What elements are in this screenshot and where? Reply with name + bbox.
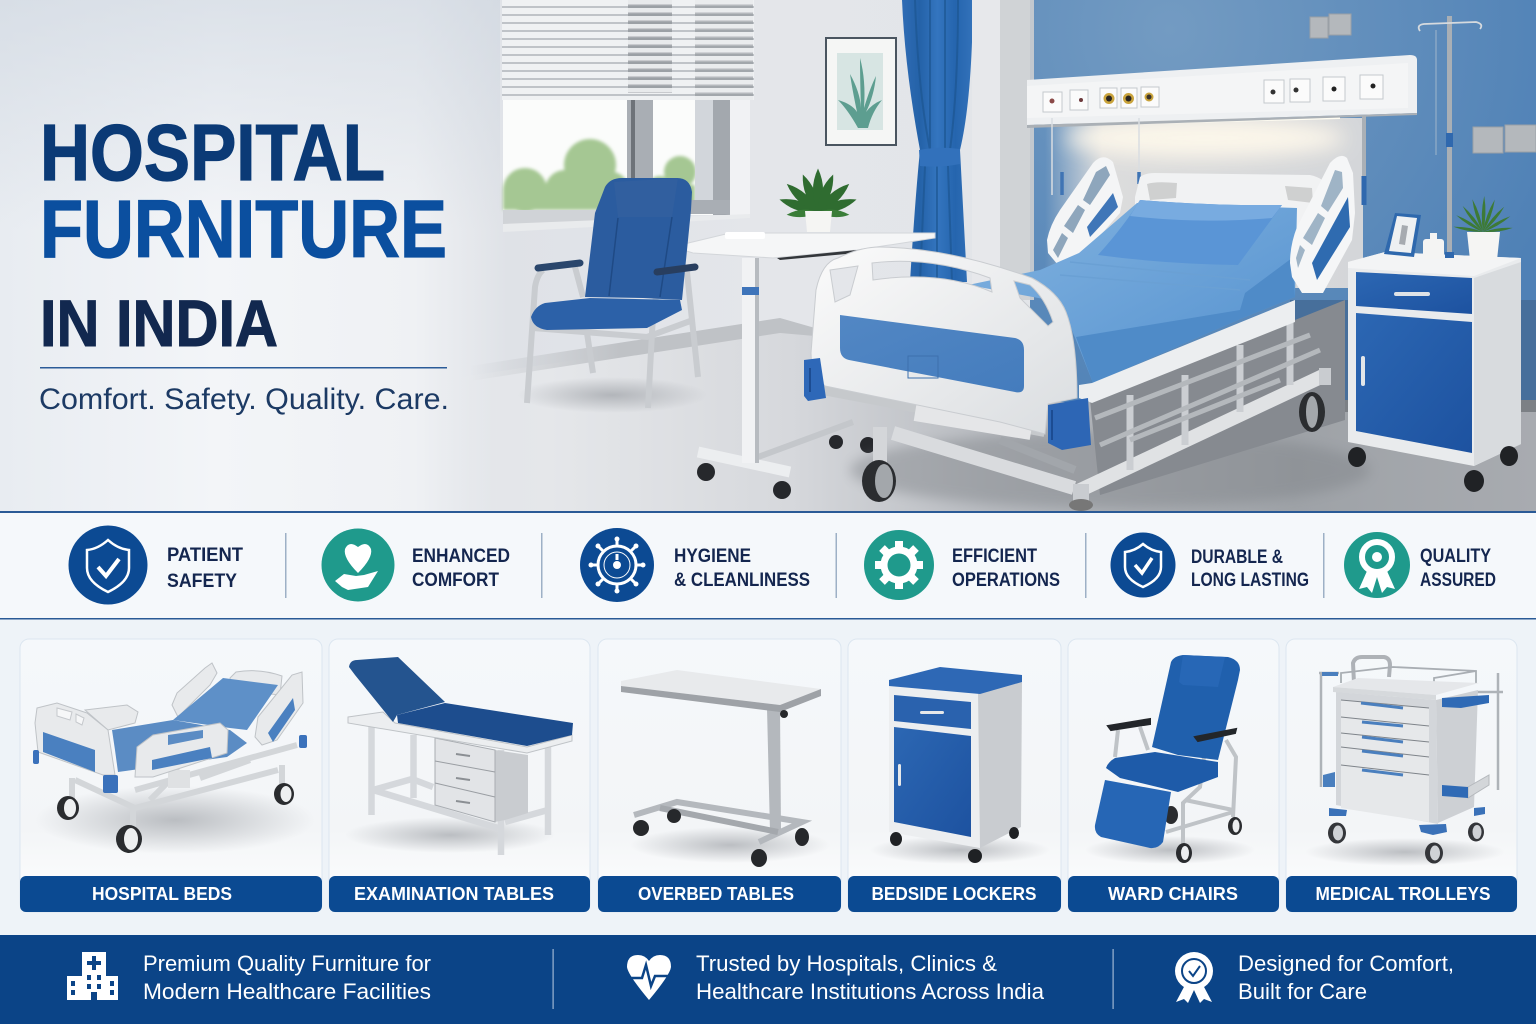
icon: quality ribbon xyxy=(1344,532,1410,598)
label: medical trolleys: MEDICAL TROLLEYS xyxy=(1316,883,1490,904)
icon: heart with pulse xyxy=(627,955,671,1000)
side deck rail xyxy=(1079,300,1295,403)
footer text: trusted by hospitals: Trusted by Hospitals, Clinics & xyxy=(696,951,997,976)
visitor chair xyxy=(517,178,707,413)
product: overbed table xyxy=(621,670,821,867)
lit wall niche xyxy=(1045,118,1363,288)
title block xyxy=(39,108,449,416)
label: hospital beds: HOSPITAL BEDS xyxy=(92,883,232,904)
benefit: durable and long lasting: DURABLE & xyxy=(1191,547,1283,568)
card: examination tables xyxy=(329,639,590,912)
icon: durable shield xyxy=(1110,532,1176,598)
pillow xyxy=(1098,200,1282,265)
icon: heart in hand xyxy=(322,528,394,602)
under-bed dark area xyxy=(1090,300,1345,495)
benefit: durable and long lasting: LONG LASTING xyxy=(1191,570,1309,591)
product: examination table xyxy=(348,657,573,855)
product: bedside locker xyxy=(889,667,1022,863)
card: bedside lockers xyxy=(848,639,1061,912)
label: ward chairs: WARD CHAIRS xyxy=(1108,883,1238,904)
footer text: premium quality: Modern Healthcare Facilities xyxy=(143,979,431,1004)
benefit: hygiene and cleanliness: & CLEANLINESS xyxy=(674,570,810,591)
footer text: designed for comfort: Designed for Comfort, xyxy=(1238,951,1454,976)
footboard blue panel xyxy=(840,315,1024,392)
casters xyxy=(862,392,1325,511)
rail left of head xyxy=(1047,157,1123,265)
icon: hospital building xyxy=(67,952,118,1000)
chassis xyxy=(823,320,1325,502)
floor xyxy=(440,330,1536,512)
benefits strip xyxy=(0,511,1536,620)
benefit: enhanced comfort: COMFORT xyxy=(412,570,499,591)
card: ward chairs xyxy=(1068,639,1279,912)
card: hospital beds xyxy=(20,639,322,912)
benefit: patient safety: SAFETY xyxy=(167,571,237,592)
patient bed xyxy=(804,156,1370,511)
label: bedside lockers: BEDSIDE LOCKERS xyxy=(872,883,1036,904)
plant on table xyxy=(778,168,858,232)
pillar xyxy=(972,0,1000,300)
curtain xyxy=(902,0,973,282)
objects on locker: photo, bottle, plant xyxy=(1384,196,1513,260)
benefit: efficient operations: EFFICIENT xyxy=(952,546,1037,567)
footer text: trusted by hospitals: Healthcare Institutions Across India xyxy=(696,979,1044,1004)
tagline: Comfort. Safety. Quality. Care. xyxy=(39,383,449,416)
product: hospital bed xyxy=(33,663,307,853)
icon: gear xyxy=(864,530,934,600)
benefit: quality assured: ASSURED xyxy=(1420,570,1496,591)
bedside locker xyxy=(1348,252,1521,492)
benefit: quality assured: QUALITY xyxy=(1420,546,1491,567)
framed plant picture xyxy=(825,37,897,146)
product: ward chair xyxy=(1095,655,1242,863)
title line 3: IN INDIA xyxy=(40,286,278,360)
benefit: efficient operations: OPERATIONS xyxy=(952,570,1060,591)
mattress xyxy=(968,203,1297,383)
benefit: enhanced comfort: ENHANCED xyxy=(412,546,510,567)
title line 2: FURNITURE xyxy=(40,184,447,275)
headboard xyxy=(1135,173,1330,235)
IV pole xyxy=(1052,16,1481,252)
footer text: designed for comfort: Built for Care xyxy=(1238,979,1367,1004)
card: overbed tables xyxy=(598,639,841,912)
overbed table xyxy=(680,232,935,499)
footer text: premium quality: Premium Quality Furniture for xyxy=(143,951,431,976)
icon: shield check xyxy=(68,526,148,604)
benefit: hygiene and cleanliness: HYGIENE xyxy=(674,546,751,567)
product: medical trolley xyxy=(1319,657,1503,864)
label: overbed tables: OVERBED TABLES xyxy=(638,883,794,904)
blue wall xyxy=(1030,0,1536,402)
label: examination tables: EXAMINATION TABLES xyxy=(354,883,554,904)
icon: award rosette xyxy=(1175,952,1213,1003)
wall switches xyxy=(1310,14,1536,153)
rail right of head xyxy=(1290,156,1355,293)
card: medical trolleys xyxy=(1286,639,1517,912)
blue corner bumpers xyxy=(1048,398,1091,450)
baseboard behind locker xyxy=(1290,400,1536,412)
window with blinds xyxy=(502,0,754,232)
title line 1: HOSPITAL xyxy=(40,108,385,197)
footer band xyxy=(0,935,1536,1024)
baseboard xyxy=(470,318,815,381)
benefit: patient safety: PATIENT xyxy=(167,545,243,566)
hero photo: hospital room xyxy=(0,0,1536,512)
medical wall panel xyxy=(1027,55,1417,128)
icon: virus / hygiene xyxy=(580,528,654,602)
footboard xyxy=(811,247,1077,434)
